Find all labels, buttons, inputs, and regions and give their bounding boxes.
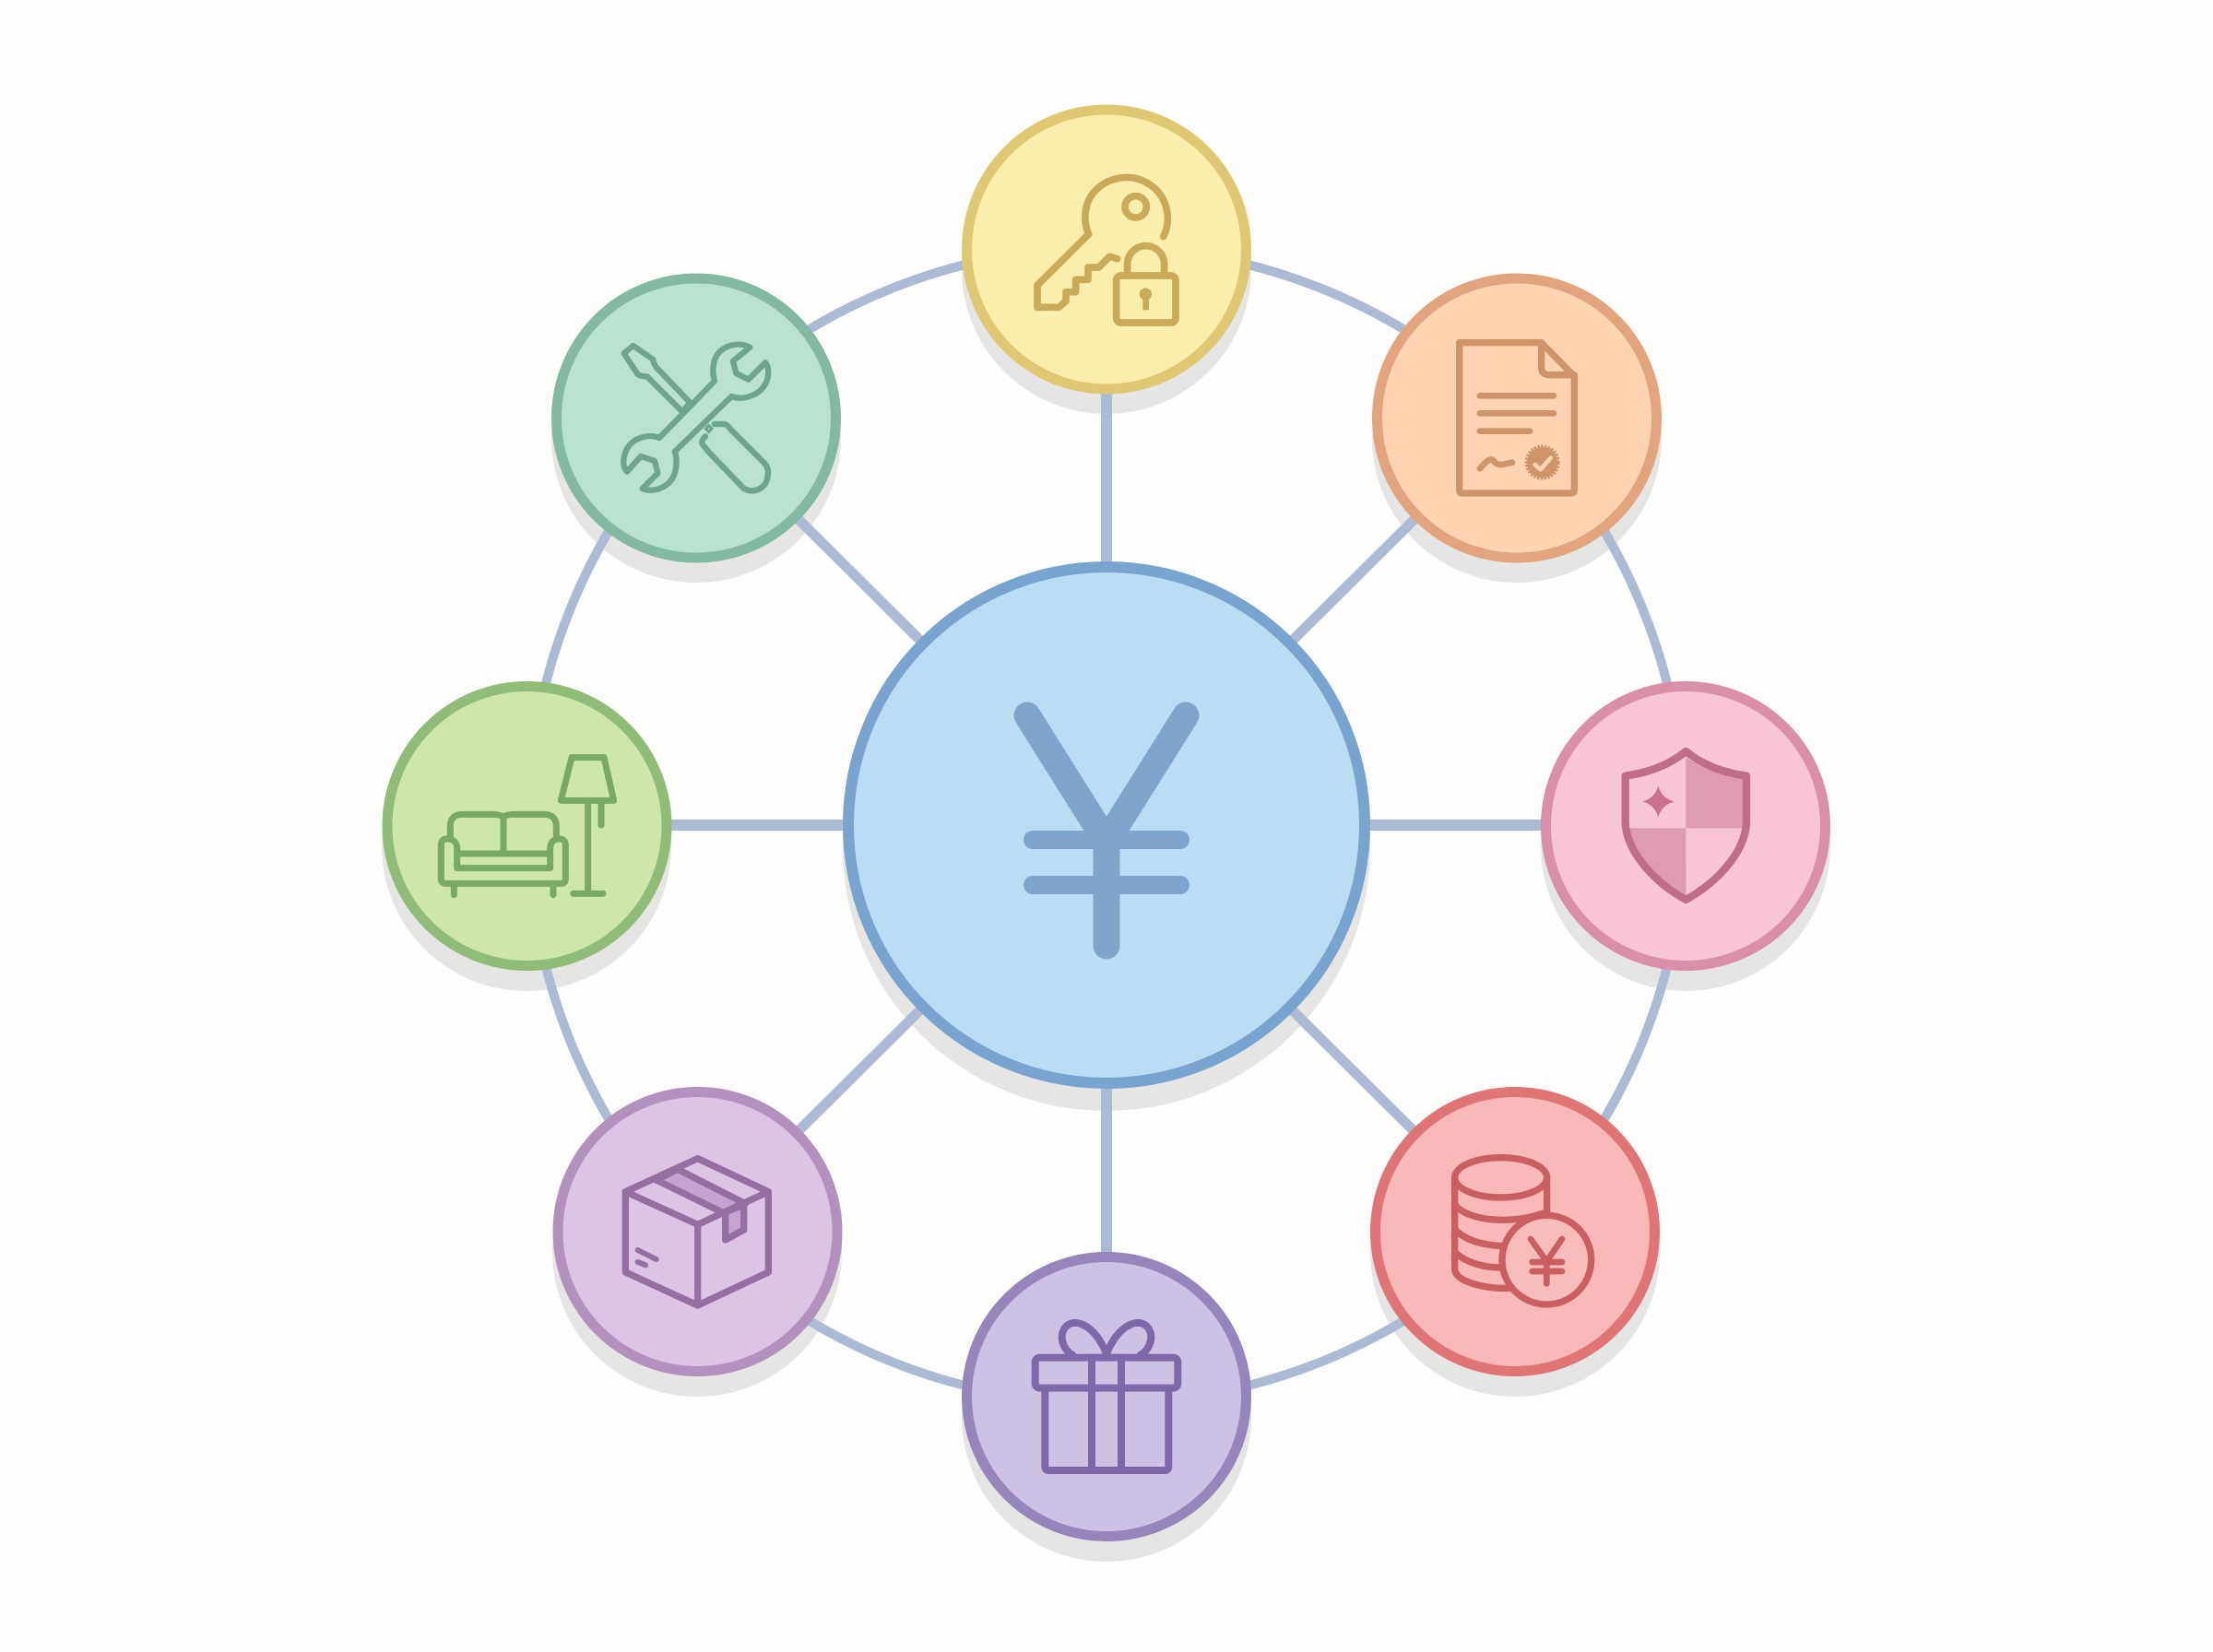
- center node: yen: [848, 567, 1365, 1083]
- node: coins: [1376, 1092, 1654, 1372]
- icon: large yen symbol: [1027, 715, 1186, 946]
- icon: crossed wrench and screwdriver: [623, 345, 768, 490]
- icon: sofa and floor lamp: [441, 758, 614, 895]
- node: furniture: [387, 686, 667, 966]
- node drop shadows: [382, 124, 1830, 1562]
- icon: coin stack with yen coin: [1455, 1158, 1592, 1304]
- icon: quartered shield: [1626, 751, 1746, 900]
- icon: cardboard box: [625, 1159, 768, 1305]
- node: contract document: [1378, 278, 1656, 558]
- node: gift: [966, 1257, 1247, 1536]
- node: shield: [1545, 686, 1826, 966]
- icon: signed document: [1460, 343, 1574, 493]
- node: parcel: [558, 1092, 837, 1372]
- outer connecting ring: [528, 247, 1685, 1403]
- node: key and padlock: [966, 110, 1247, 389]
- node: tools: [557, 278, 835, 558]
- icon: key and padlock: [1037, 177, 1176, 323]
- radial spokes: [527, 249, 1686, 1397]
- icon: gift box: [1035, 1323, 1178, 1470]
